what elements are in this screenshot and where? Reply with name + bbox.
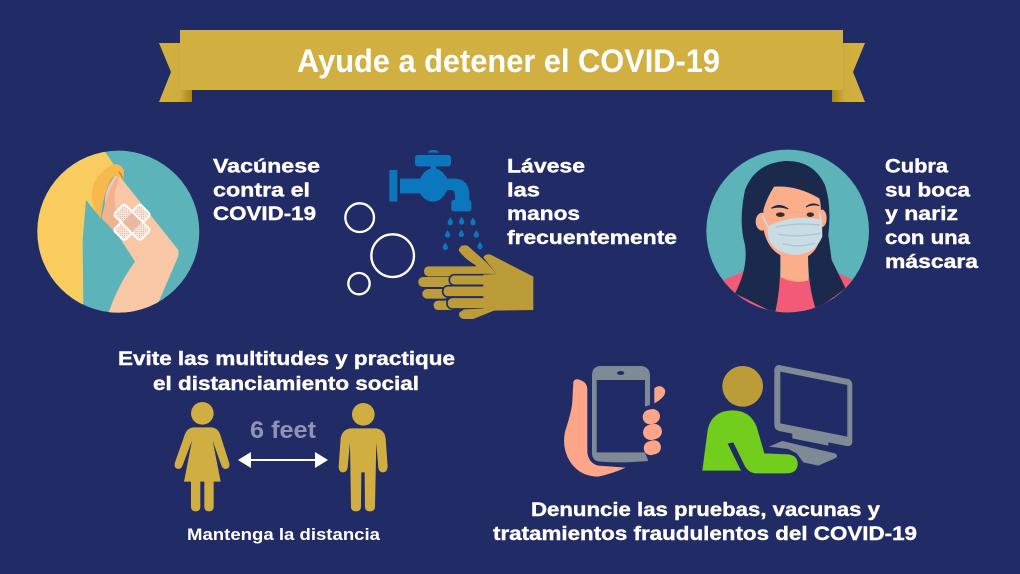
text: wash hands: frecuentemente xyxy=(507,227,677,249)
icon: man figure xyxy=(339,403,388,511)
icon: woman figure xyxy=(175,402,229,511)
text: vaccinate: Vacúnese xyxy=(213,156,320,178)
icon: faucet, soap bubbles and hands xyxy=(345,150,533,319)
text: vaccinate: contra el xyxy=(213,180,310,202)
text: cover mouth and nose: máscara xyxy=(885,251,978,273)
text: wash hands: manos xyxy=(507,203,580,225)
text: report fraud: tratamientos fraudulentos del COVID-19 xyxy=(493,523,917,545)
heading: avoid crowds: el distanciamiento social xyxy=(153,373,419,395)
icon: woman wearing mask xyxy=(706,150,869,322)
heading: avoid crowds xyxy=(118,348,455,395)
title: Ayude a detener el COVID-19 xyxy=(297,43,720,79)
icon: person at computer xyxy=(702,365,852,473)
text: wash hands: las xyxy=(507,180,540,202)
text: cover mouth and nose xyxy=(885,156,978,273)
icon: hand holding phone xyxy=(564,366,665,477)
text: cover mouth and nose: con una xyxy=(885,227,970,249)
heading: avoid crowds: Evite las multitudes y practique xyxy=(118,348,455,370)
text: wash hands: Lávese xyxy=(507,156,585,178)
text: report fraud xyxy=(493,499,917,545)
text: cover mouth and nose: Cubra xyxy=(885,156,948,178)
text: cover mouth and nose: y nariz xyxy=(885,203,958,225)
label: 6 feet: 6 feet xyxy=(250,417,316,444)
text: vaccinate: COVID-19 xyxy=(213,203,316,225)
caption: keep distance: Mantenga la distancia xyxy=(187,525,381,544)
text: cover mouth and nose: su boca xyxy=(885,180,970,202)
icon: hands xyxy=(418,245,533,319)
arrow: two-way distance xyxy=(238,452,328,468)
text: report fraud: Denuncie las pruebas, vacunas y xyxy=(531,499,880,521)
title banner xyxy=(159,30,865,102)
text: wash hands xyxy=(507,156,677,249)
icon: vaccinated arm xyxy=(37,150,200,313)
icon: bubbles xyxy=(345,203,414,294)
text: vaccinate xyxy=(213,156,320,225)
icon: faucet xyxy=(389,150,483,250)
